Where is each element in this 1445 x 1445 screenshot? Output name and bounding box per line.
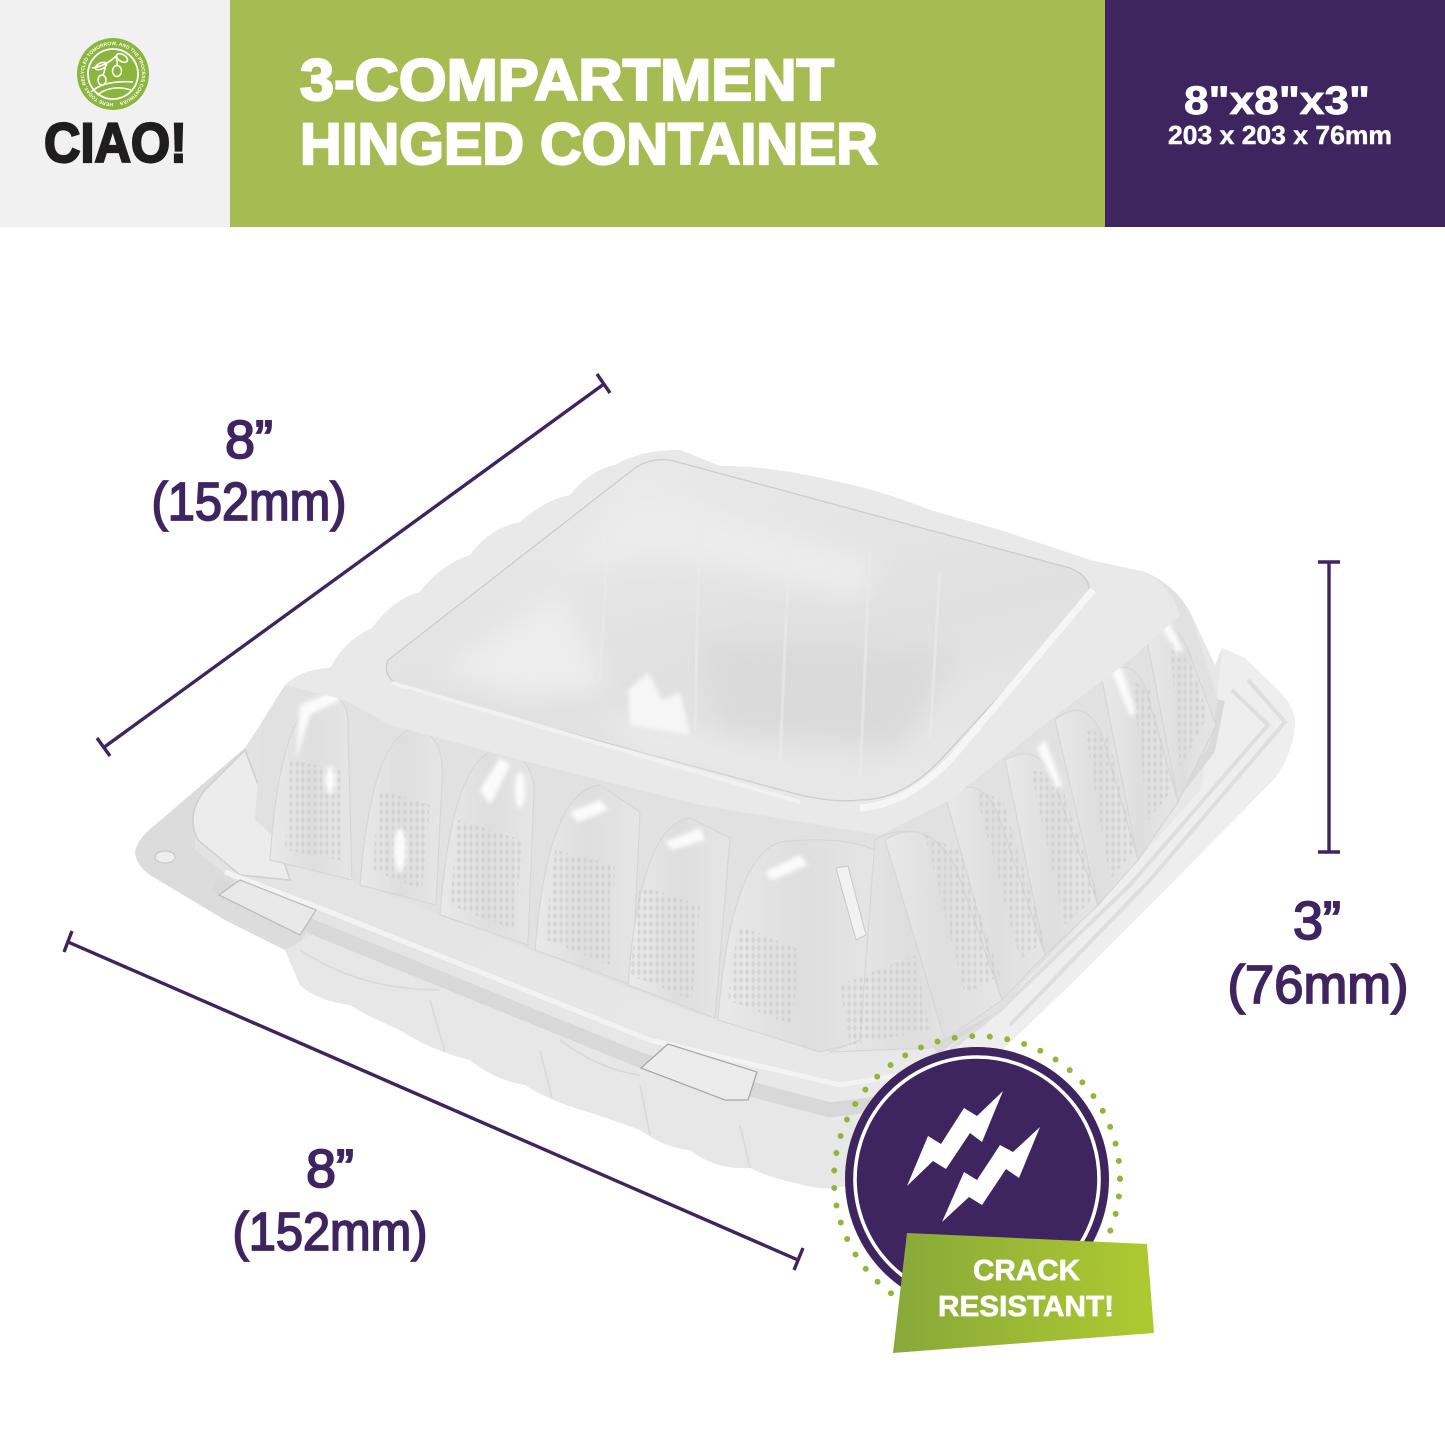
dimension label: height: 3” <box>1293 891 1341 951</box>
icon: olive branch seal: HERE TODAY, RECYCLED TOMORROW, AND THE PROCESS CONTINUES <box>80 42 146 106</box>
lobe highlights <box>296 620 1183 880</box>
left clasp <box>219 880 316 935</box>
dimension label: width <box>232 1139 428 1262</box>
front clasp <box>641 1044 757 1100</box>
flange hole <box>155 851 175 863</box>
dimension line: depth <box>97 374 610 756</box>
dimension label: depth <box>152 410 346 532</box>
header: title panel <box>230 0 1105 227</box>
size in millimetres: 203 x 203 x 76mm <box>1168 120 1392 150</box>
dimension label: width: 8” <box>306 1139 354 1199</box>
rim ridges <box>950 680 1285 1050</box>
title: HINGED CONTAINER <box>300 112 878 177</box>
title: 3-COMPARTMENT <box>300 48 834 113</box>
top panel of lid <box>386 460 1090 801</box>
dimension line: width <box>64 931 803 1270</box>
hinge strip <box>215 885 925 1110</box>
scalloped lid shoulder <box>285 450 1180 835</box>
size in inches: 8"x8"x3" <box>1184 79 1370 123</box>
lower tray <box>285 930 905 1188</box>
dimension line: height <box>1318 562 1340 852</box>
product: clear hinged container <box>135 450 1295 1188</box>
dotted ring <box>834 1036 1120 1322</box>
ribbon text: CRACK <box>973 1255 1080 1287</box>
dimension label: depth: 8” <box>225 410 273 470</box>
green ribbon <box>893 1233 1154 1353</box>
ribbon text: RESISTANT! <box>938 1291 1114 1323</box>
embossed textures front <box>285 760 930 1045</box>
header: size panel <box>1105 0 1445 227</box>
badge: crack resistant <box>834 1036 1154 1353</box>
title <box>300 48 878 177</box>
flange left <box>135 748 318 950</box>
embossed textures right <box>925 640 1208 995</box>
container silhouette <box>135 450 1295 1188</box>
header: logo panel <box>0 0 230 227</box>
inner well shading <box>440 490 960 785</box>
lobes on right wall <box>885 625 1216 1040</box>
faint vertical streaks in lid <box>600 500 940 780</box>
ribbon text <box>938 1255 1114 1323</box>
logo wordmark: CIAO! <box>44 111 187 174</box>
purple disc <box>845 1047 1109 1311</box>
dimension label: height <box>1228 891 1408 1015</box>
lid sides <box>255 500 1218 1052</box>
dimension label: depth: (152mm) <box>152 472 346 532</box>
white right rim of panel <box>860 590 1093 808</box>
icon: lightning bolts <box>907 1091 1040 1222</box>
right rim <box>870 648 1295 1125</box>
lobes on front wall <box>270 695 985 1052</box>
dimension label: width: (152mm) <box>232 1202 428 1262</box>
lower tray creases <box>300 950 750 1168</box>
inner tray edge <box>193 750 290 880</box>
dimension label: height: (76mm) <box>1228 955 1408 1015</box>
reflection on panel <box>628 672 690 735</box>
vent tab on lobe <box>836 866 866 940</box>
